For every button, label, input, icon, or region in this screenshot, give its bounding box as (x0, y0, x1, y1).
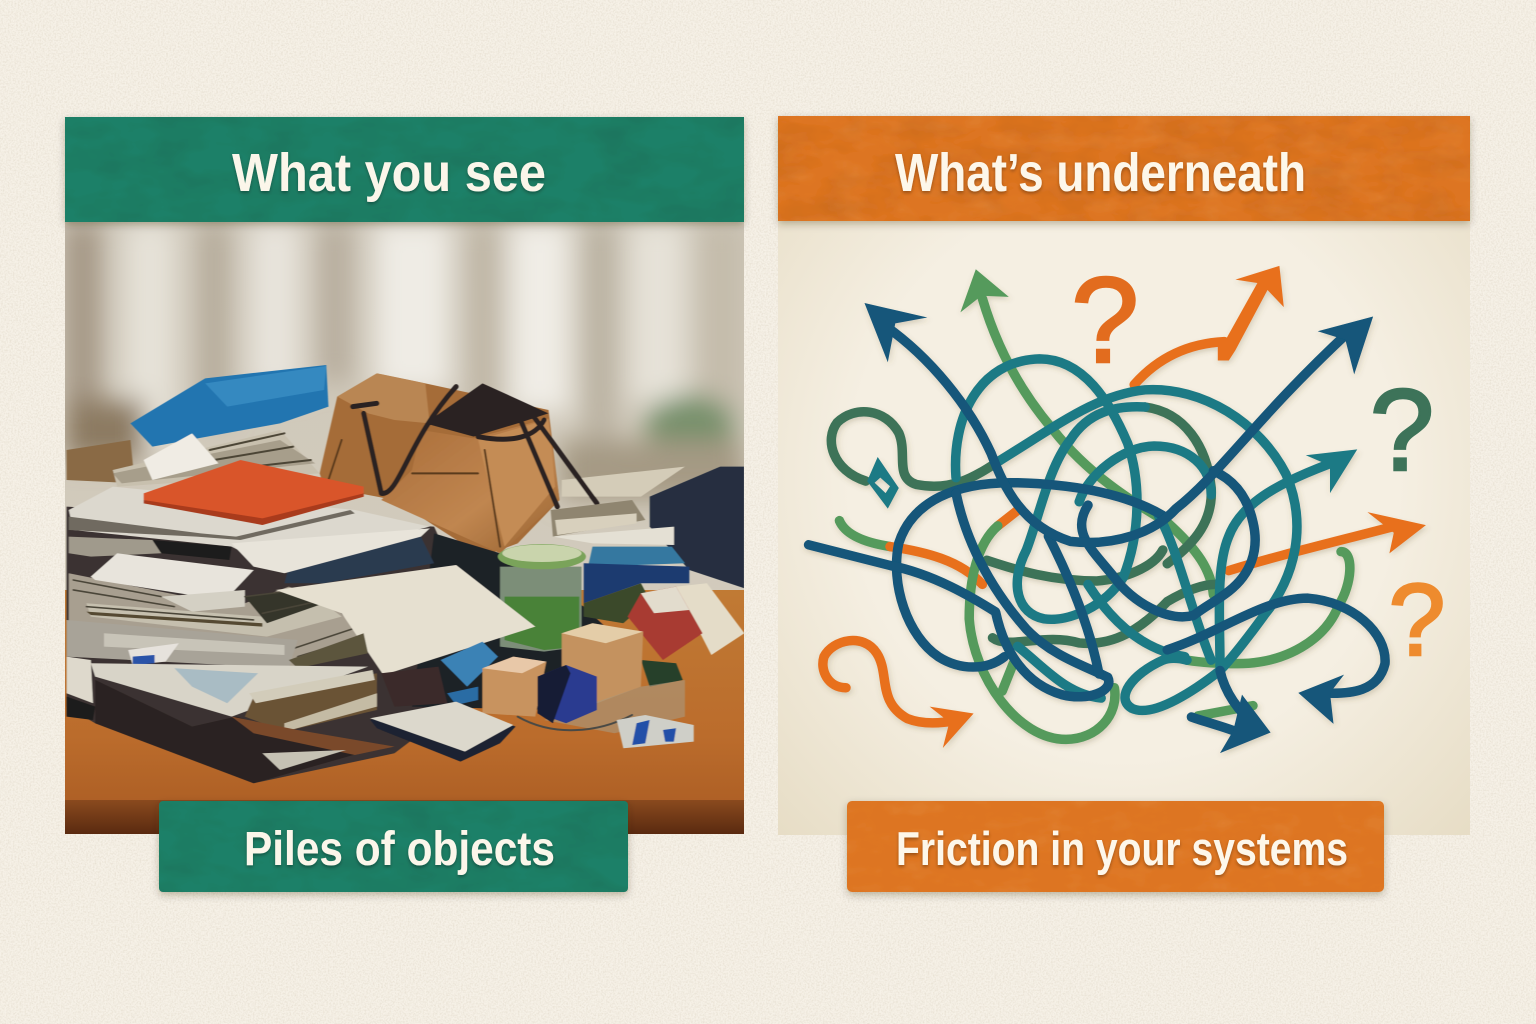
base shadow beneath piles (67, 507, 500, 783)
question mark: light orange: ? (1389, 563, 1445, 677)
bag (320, 373, 560, 557)
header: what's underneath: What’s underneath (895, 143, 1306, 203)
arrow heads (864, 266, 1426, 753)
tangled arrows diagram (809, 266, 1426, 753)
label: piles of objects: Piles of objects (244, 823, 555, 876)
table (65, 590, 744, 800)
tangle strands (809, 299, 1396, 739)
panel: what you see (65, 117, 744, 892)
header: what you see: What you see (232, 143, 546, 203)
question mark: orange top: ? (1071, 252, 1139, 388)
squiggle arrow (823, 641, 956, 723)
paper panel (778, 116, 1470, 835)
label: friction in your systems: Friction in your systems (896, 822, 1348, 875)
bag, books and papers (67, 440, 135, 483)
label: piles of objects (159, 801, 628, 892)
question mark: green: ? (1370, 365, 1434, 495)
header: what you see (65, 117, 744, 222)
photo: cluttered desk with piles of objects (65, 222, 744, 834)
header: what's underneath (778, 116, 1470, 221)
panel: what's underneath (778, 116, 1470, 892)
label: friction in your systems (847, 801, 1384, 892)
